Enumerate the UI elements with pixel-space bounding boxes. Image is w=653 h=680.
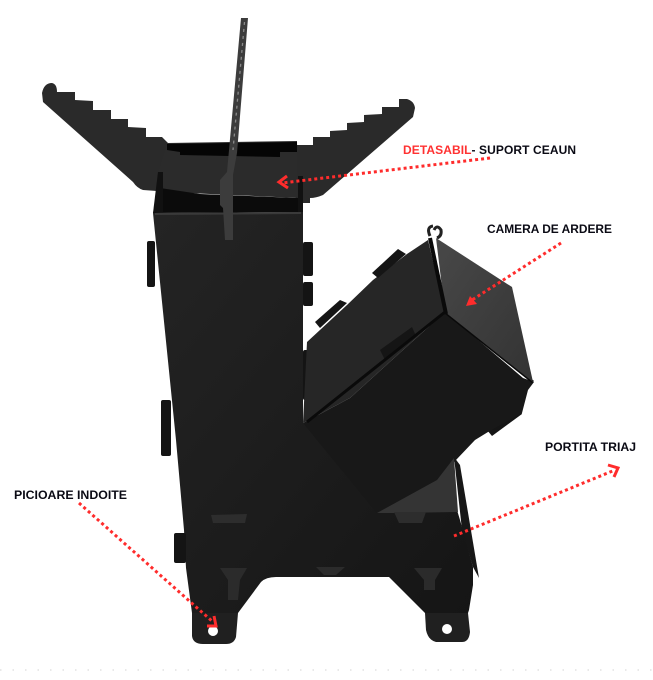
- pot support: centre panel: [153, 141, 303, 213]
- chamber tabs: [315, 249, 522, 470]
- combustion chamber: upper panel: [303, 240, 445, 423]
- vertical rod: [220, 18, 248, 240]
- foot holes: [208, 624, 452, 636]
- pot support: right arm: [280, 99, 415, 203]
- right foot: [425, 613, 470, 642]
- arrow: to combustion chamber: [466, 243, 561, 306]
- label: combustion chamber: CAMERA DE ARDERE: [487, 222, 612, 236]
- stove: [42, 18, 534, 644]
- arrow: to pot support: [279, 158, 490, 188]
- left foot: [192, 613, 238, 644]
- label: detachable pot support: DETASABIL- SUPORT CEAUN: [403, 143, 576, 157]
- column side tabs: [147, 241, 314, 563]
- label: ash door: PORTITA TRIAJ: [545, 440, 636, 454]
- label: folded feet: PICIOARE INDOITE: [14, 488, 127, 502]
- ash door: [211, 457, 479, 578]
- chamber hinge loops: [429, 226, 441, 238]
- pot support: left arm: [42, 83, 182, 195]
- arrow: to ash door: [454, 465, 618, 536]
- chamber front door: [436, 238, 533, 382]
- base latches: [220, 567, 442, 600]
- arrow: to folded feet: [79, 503, 216, 626]
- chamber lower panel: [303, 312, 534, 513]
- column and base: [153, 212, 473, 613]
